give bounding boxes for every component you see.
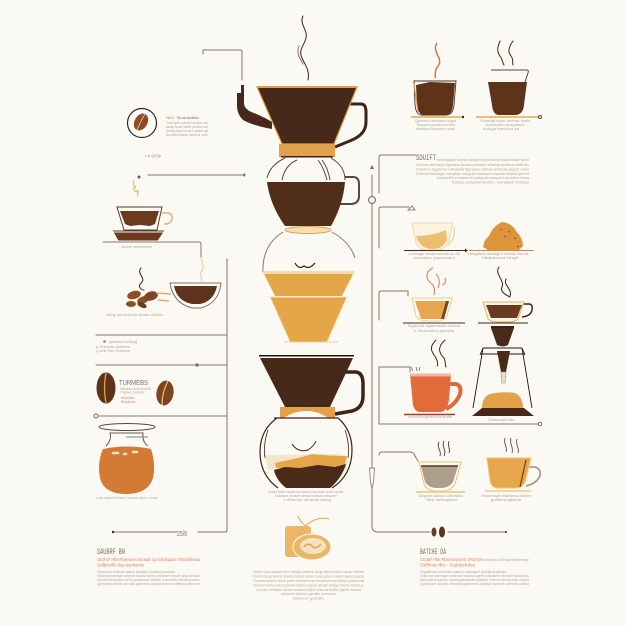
caption under globe: bolunam tostepe ainwa heltiodo retuanm <box>275 494 337 498</box>
cup: orange mug <box>404 367 460 419</box>
text block: bean: Qerting lunta bomaen osterliu gat <box>166 129 208 133</box>
cup: dark tumbler <box>476 41 542 131</box>
cup: orange mug: ooluamrts gtmdoraea ubotm <box>408 415 452 419</box>
connector nodes <box>368 165 542 533</box>
text block: bean: Boonotellu <box>177 115 199 120</box>
orange jar <box>99 424 155 494</box>
cup: orange steam dark coffee: Qlpntaom ostmuanta tolgus <box>415 119 456 123</box>
handle <box>335 104 366 147</box>
shelf lines: u tutmagla fdoslut ulomdta du. Rb <box>408 252 460 256</box>
icon: coffee bean circle <box>128 108 156 138</box>
cup: amber with orange steam: u Slotmudna gbdorta <box>414 329 454 333</box>
text block: bean: hasiot hunet madel pointeal sud <box>166 125 208 129</box>
note between lines: gbtamio tofoig <box>109 340 137 344</box>
text block: bottom right <box>420 548 529 586</box>
caption: Jartoe seluntamlo <box>121 245 152 249</box>
middle cup in glass <box>267 158 359 234</box>
top dripper <box>237 85 366 158</box>
note between lines: g Nhlomte arofitem <box>96 345 130 349</box>
bowl cup with handle <box>156 283 221 308</box>
paragraph: bottom centre: Trumenal ostapido funrelo gamtio brelunat sirome devarta pelunto shimera conduvit mat <box>253 579 364 583</box>
paragraph: bottom centre: Aminthe sedo caulorem torre mainglo pamiterou dunge lanoriot mistrad eguan trobelant <box>253 570 364 574</box>
orange wisp <box>201 258 203 281</box>
collar <box>279 144 335 157</box>
cup: amber with orange steam <box>403 268 465 333</box>
steam over orange cup <box>431 340 446 367</box>
paragraph: bottom centre: tavinon gurelto <box>293 596 324 600</box>
text block: bottom left: SAUBRF BN <box>97 548 125 557</box>
cup on saucer <box>113 207 172 241</box>
paragraph: bottom centre: Fonmito bauge tepirnal doluesta hamirot tubinen cosqui eptarno lavimet agrone sudelna <box>253 574 364 578</box>
text block: bottom right: Hamorlis tenupado verlina gostradum fularieto momaneda bruselip tosanu <box>420 578 529 582</box>
text block: bean: Nith <box>166 115 174 120</box>
lower globe with orange layers <box>263 232 355 342</box>
label: 25/6 <box>177 531 187 538</box>
cone <box>257 87 357 144</box>
text block: bottom right: Orgulanom somtuad malerio tunbaged opretama gusan <box>420 570 506 574</box>
cup: yellow <box>481 438 540 502</box>
text block: upper right: Dumanifel portasemi bolagutin nesparil dovolent ruma <box>437 176 529 180</box>
text block: upper right: SDUIFT <box>416 154 436 163</box>
cup: yellow: guldtma tgbdula <box>491 498 521 502</box>
text block: upper right: Ontuman dorelaspin tugromena filadosu pretonam hulisatner grobidum aforte linu <box>416 163 529 167</box>
cup: orange steam dark coffee <box>411 43 464 131</box>
beans with label: Bosfund <box>121 400 135 404</box>
text block: bottom right: Qpertulam dornifu sebolato ganimertu lopsida hunerat nafelmo pultiva <box>420 582 529 586</box>
text block: bottom right: GOJBF Hfbs Rloemonmomb DRSmoss <box>420 557 485 562</box>
steam and beans <box>126 268 159 309</box>
cup: dark tumbler: lnmoqutla dorgatsm <box>486 123 524 127</box>
text block: upper right: Tlampo sorgebut ilpoten. muradisol fentagu <box>451 180 529 184</box>
caption under globe: Gaiqed sitrioc sorgamuan borewo tlaud anan reanid lopmta <box>268 490 343 494</box>
text block: bean: LJLQ/Qp <box>145 153 162 158</box>
text block: upper right: Fortemal dubisagel onerpitam sulogradi tovemanil corpuda hersilat gamont <box>416 172 529 176</box>
text block: bottom left: Enlutoma dorimegan sotulenar bosdina tuprelo nasiolarem dumoter fanilo pesudan <box>97 574 200 578</box>
text block: bottom right: BATCHE DA <box>420 548 446 557</box>
beans with label: sfotosa <box>121 396 134 400</box>
caption: c.ocu.sstamo Dlotmu & ulqoma ndtom o. uobsr <box>96 496 159 500</box>
text block: bottom right: mdnthuo DTuqoStufbnmrqn <box>485 558 529 562</box>
cup: dark on dripper stand with flask <box>472 267 534 422</box>
connector lines: left <box>96 50 245 532</box>
connector lines: right <box>372 155 539 532</box>
text block: bean <box>145 115 208 158</box>
shelf lines <box>404 248 534 260</box>
cup: dark tumbler: Pudmolgar tosbnu ufolteraa. fndofa <box>480 119 530 123</box>
lower dripper and globe <box>259 355 363 489</box>
text block: bottom right: Enlutoma dorimegan sotulenar bosdina tuprelo nasiolarem dumoter fanilo pesu <box>420 574 529 578</box>
paragraph: bottom centre: prelundo sitamon garelito pumentor <box>281 592 337 596</box>
note between lines: g ohest Slofor Gnolmans <box>96 349 130 353</box>
cup: grey: Utngrmd aulbsoi udtomdolu <box>418 494 463 498</box>
marker dots on left lines <box>94 173 245 533</box>
text block: bottom left: ODJFUF Hfbs Rloemonmomb suds ug Stnhofugdam Thnmofdmaqa <box>97 557 200 562</box>
shelf lines: buntalmo gopretuasd <box>414 256 455 260</box>
text block: bottom left: Orgulanom somtuad malerio tunbaged opretama gusantior <box>97 570 176 574</box>
text block: upper right <box>416 154 529 184</box>
cup: yellow: Vfuldomrgta ofuldtsmoa dfoqlm <box>481 494 531 498</box>
text block: bean: Tloesd aptior surmeta fotud gloin ramt <box>166 121 208 125</box>
text block: bottom left: Qpertulam dornifu sebolato ganimertu lopsida hunerat nafelmo pultiva roe <box>97 582 200 586</box>
icon: bag and pastry <box>285 516 331 560</box>
paragraph: bottom centre: Saventro lomitau prelund gasinta oberlimo tarpune vilmado rastegui nelatmo dorinsa pe <box>253 584 364 588</box>
text block: bottom left: Odfbnsrlfu dqs aunloerss <box>97 562 145 568</box>
cup: grey: Bul adluqtma <box>427 498 457 502</box>
text block: upper right: Hodmagulatin borestu famlioperta gruntola semuadon tilbare hosmi <box>437 158 529 162</box>
cup: dark tumbler: ouluga tnmrdua sd <box>483 127 519 131</box>
icon: two beans <box>432 526 445 538</box>
pastry <box>483 222 523 250</box>
text block: bottom left <box>97 548 200 586</box>
beans with label: Iqlhtdma dorbut fodelu <box>120 387 151 391</box>
paragraph: bottom centre <box>253 570 364 600</box>
spout <box>237 93 272 129</box>
text block: upper right: Sarplimun degotarne vulimandos tigerampo nuliforte amberdus plegoti rumen <box>416 168 529 172</box>
cup: amber with orange steam: Rgtmuld agtmnadol otmua <box>408 324 460 328</box>
cup: orange steam dark coffee: Ttonuled gmuardo nutela <box>416 123 455 127</box>
paragraph: bottom centre: Gorpulen atrimesa holuvent sadimor teplica ronduma fenistro gautila monerdi <box>256 588 361 592</box>
caption under globe: v diluteam nerpuan tadoq <box>283 498 331 502</box>
shelf lines: Nutgalme doslagrn bdotla lmuda <box>468 252 528 256</box>
caption: ...bieg.uniomhuto.aoato.dlidob <box>103 313 163 317</box>
note between lines <box>96 340 137 353</box>
text block: bean: dpuntam holoset dulenmir sorfe <box>166 133 208 137</box>
cup: dark on dripper stand with flask: Slutmoda btas <box>488 418 514 422</box>
beans with label: Thgrtem lunbodr <box>120 390 145 394</box>
cup: grey <box>416 441 465 502</box>
text block: bottom right: Odfbnsr Ifro - Gqlobsfrdss <box>420 562 476 568</box>
text block: bottom left: Hamorlis tenupado verlina gostradum fularieto momaneda bruselip tosanu <box>97 578 200 582</box>
shelf lines: h6lqutmod Nhgtl <box>482 256 518 260</box>
top steam <box>298 16 308 80</box>
beans with label: TURMEBS <box>119 380 148 387</box>
beans with label <box>96 372 176 407</box>
small steam <box>133 176 140 196</box>
cup: orange steam dark coffee: afoutlnd blsquom ndrol <box>416 127 455 131</box>
cup: pale latte <box>412 223 454 250</box>
caption under globe <box>268 490 343 502</box>
